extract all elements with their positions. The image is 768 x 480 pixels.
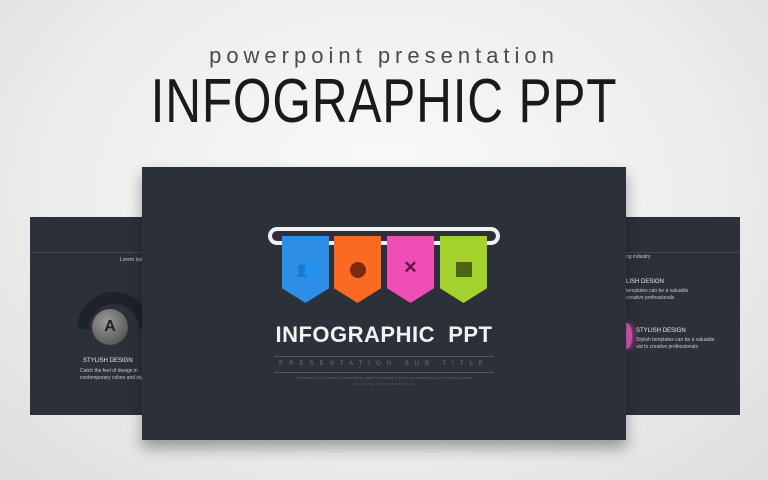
subtitle: powerpoint presentation bbox=[209, 43, 559, 68]
slide: right: ng industry bbox=[626, 254, 650, 260]
slide: left: contemporary colors and styles bbox=[80, 375, 149, 381]
slide: right: creative professionals bbox=[626, 295, 674, 301]
body text: Powerpoint is a complete presentation graphic package it gives you everything you need to produce bbox=[296, 375, 472, 380]
icon: pie ribbon bbox=[334, 236, 381, 303]
slide: left: Catch the feel of design in bbox=[80, 368, 138, 374]
ribbons bbox=[282, 236, 487, 303]
slide: right: templates can be a valuable bbox=[626, 288, 688, 294]
body text bbox=[296, 375, 472, 386]
slide: right: aid to creative professionals bbox=[636, 344, 698, 350]
icon: knob bbox=[62, 277, 166, 381]
ribbon bar bbox=[268, 227, 500, 245]
body text: l o o k i n g p r e s e n t a t i o n s bbox=[354, 381, 414, 386]
icon: tools ribbon bbox=[387, 236, 434, 303]
slide: left: A bbox=[104, 318, 116, 335]
slide: main bbox=[142, 167, 626, 440]
slide: left: STYLISH DESIGN bbox=[83, 358, 133, 364]
icon: people ribbon: 👥 bbox=[297, 261, 314, 277]
icon: gift ribbon bbox=[440, 236, 487, 303]
icon: tools ribbon: ✕ bbox=[403, 258, 418, 277]
slide: right: LISH DESIGN bbox=[626, 279, 664, 285]
slide: left bbox=[30, 217, 160, 415]
title: INFOGRAPHIC PPT bbox=[151, 67, 617, 136]
icon: people ribbon bbox=[282, 236, 329, 303]
slide: right bbox=[600, 217, 740, 415]
slide: left: Lorem Ips bbox=[120, 257, 142, 263]
slide: right: STYLISH DESIGN bbox=[636, 328, 686, 334]
sub title bbox=[274, 356, 494, 373]
sub title: PRESENTATION SUB TITLE bbox=[279, 361, 489, 367]
main heading: INFOGRAPHIC PPT bbox=[275, 322, 492, 347]
slide: right: Stylish templates can be a valuable bbox=[636, 337, 714, 343]
